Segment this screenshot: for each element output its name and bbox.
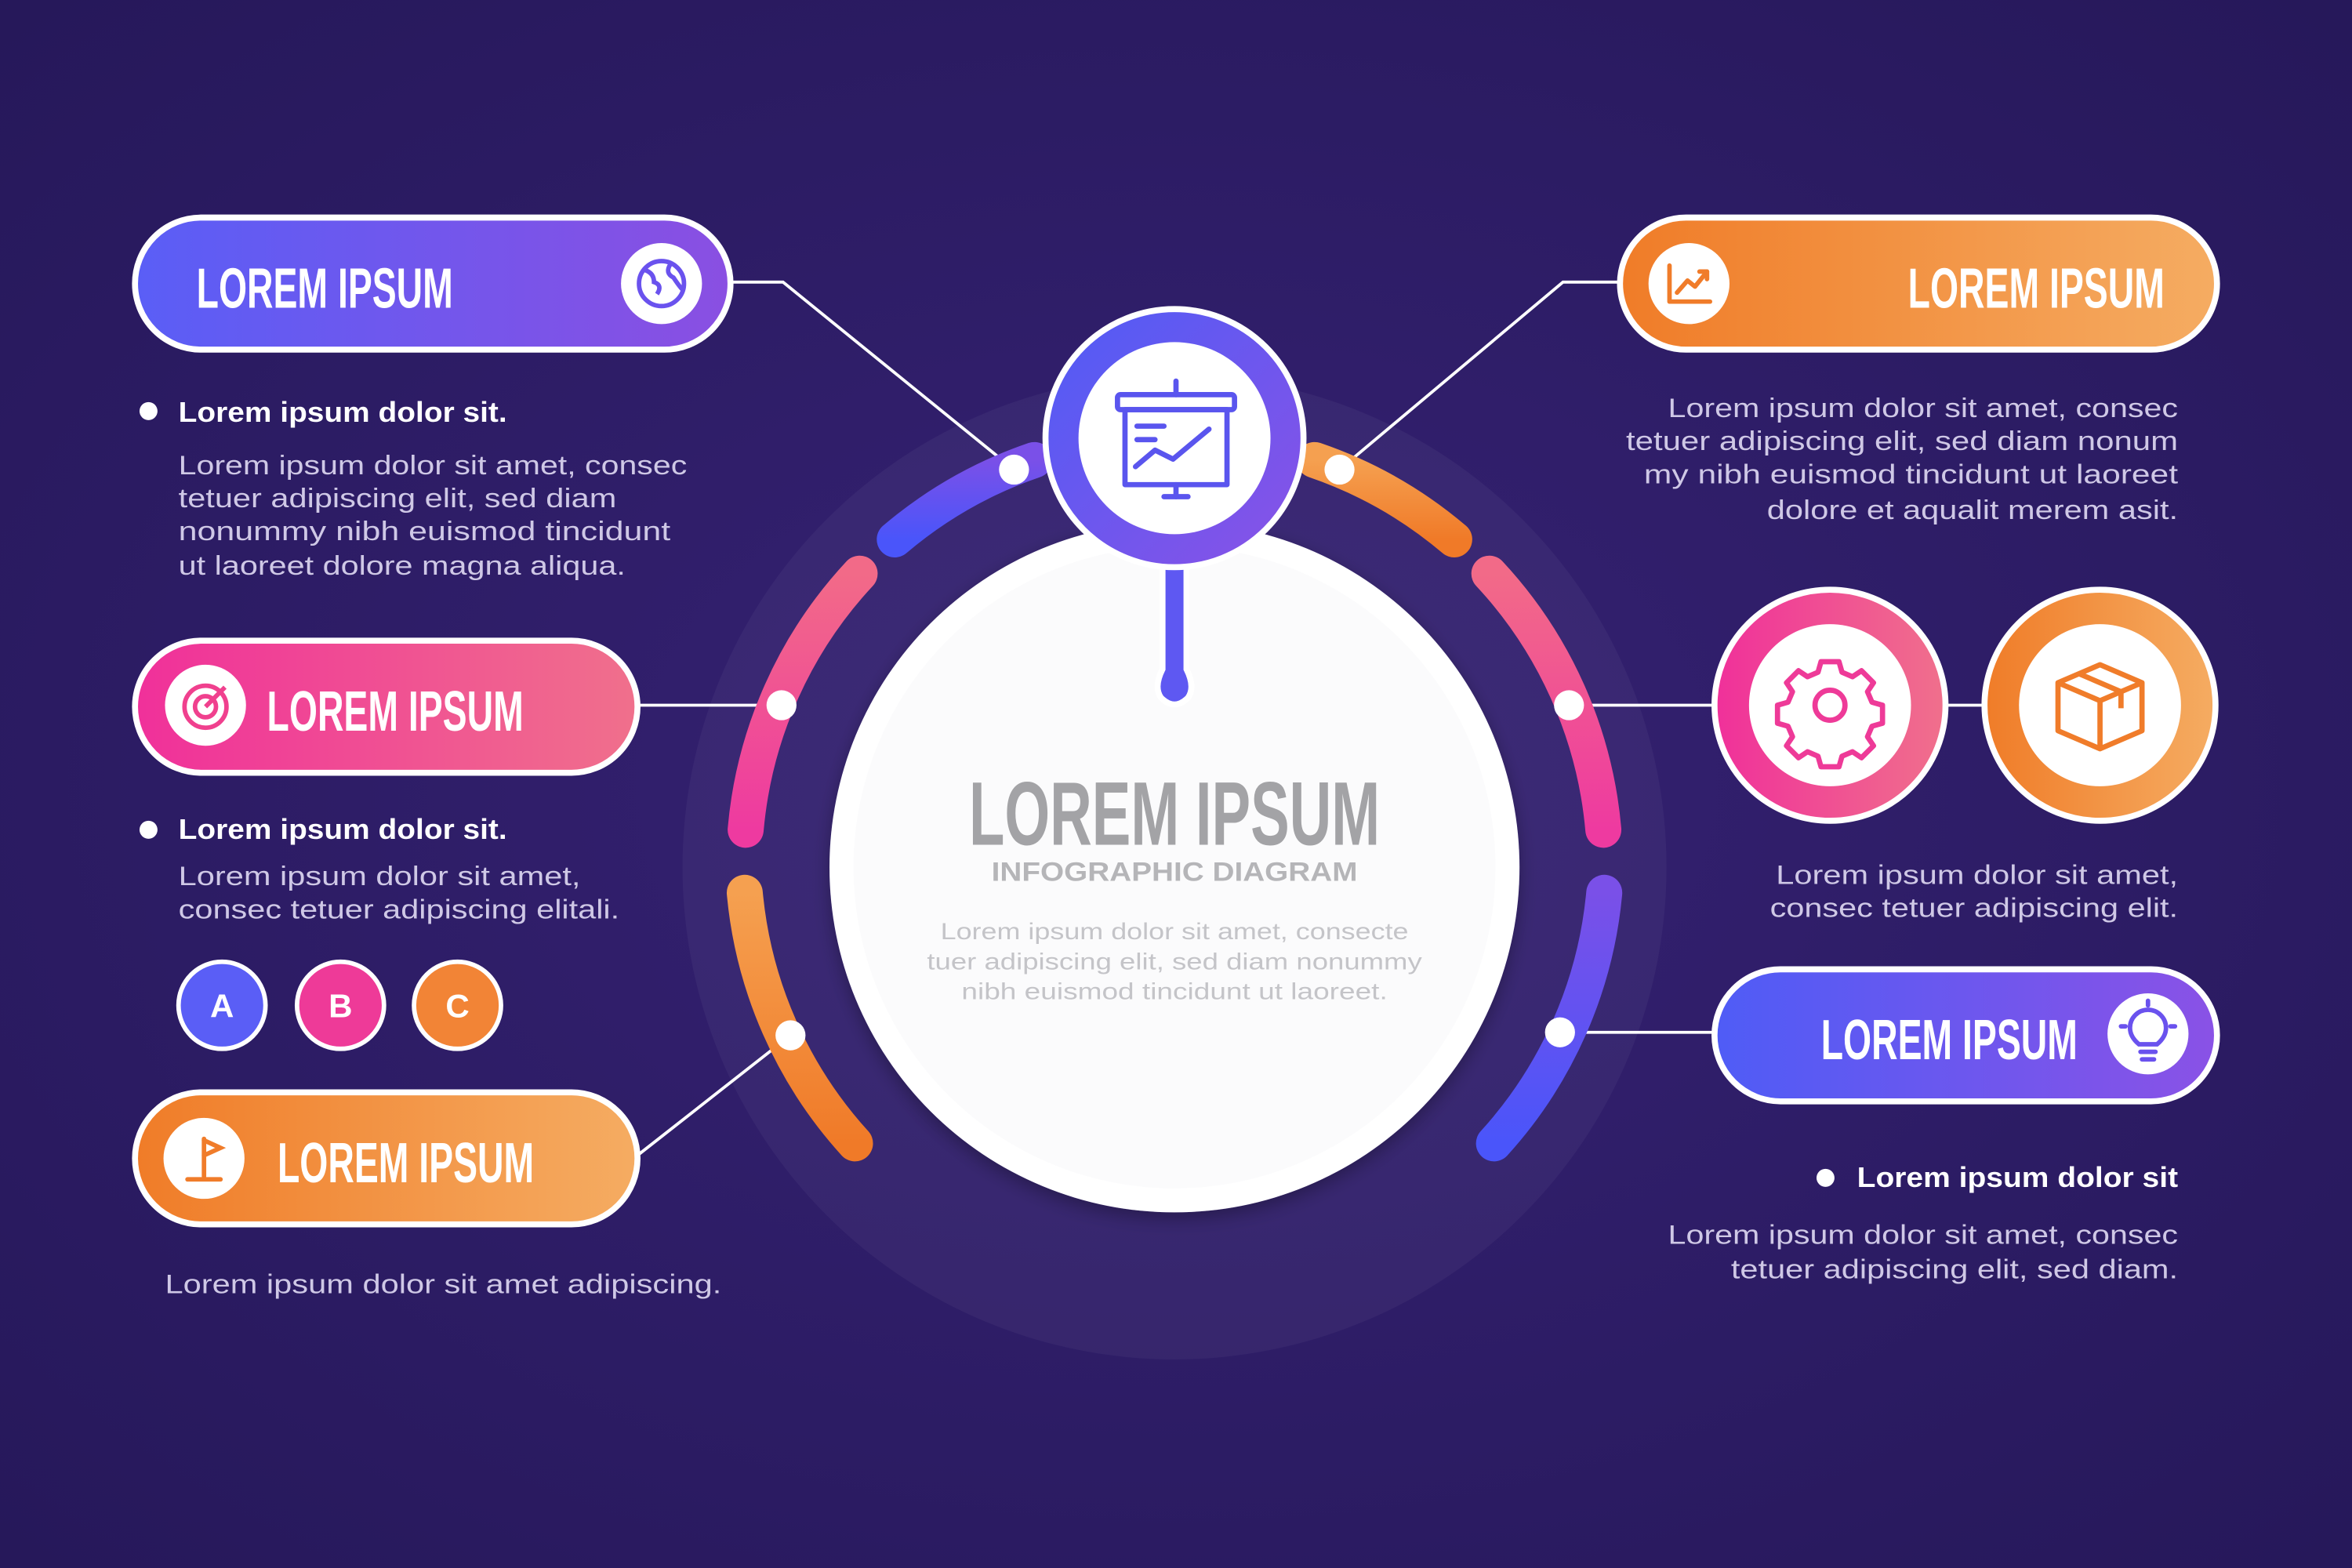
text block: bottom-right: Lorem ipsum dolor sit [1857,1161,2178,1193]
text block: bottom-right: tetuer adipiscing elit, sed diam. [1731,1255,2178,1285]
text block: top-right: my nibh euismod tincidunt ut laoreet [1644,459,2179,489]
ABC circles: A [210,988,234,1025]
pill: top-left blue: LOREM IPSUM [197,256,453,320]
arc: left pink [746,574,859,829]
ABC circles: B [328,988,353,1025]
text block: top-left: Lorem ipsum dolor sit amet, consec [179,451,687,481]
text block: top-left: ut laoreet dolore magna aliqua. [179,551,626,581]
text block: left middle: consec tetuer adipiscing elitali. [179,895,619,924]
text block: bottom-right: Lorem ipsum dolor sit amet, consec [1668,1221,2178,1250]
text block: top-right: tetuer adipiscing elit, sed diam nonum [1626,426,2178,456]
pill: left pink: LOREM IPSUM [267,680,524,743]
pill: left pink [135,641,637,773]
icon: flag [164,1118,245,1199]
pill: bottom-left orange [135,1092,637,1225]
pill: top-right orange [1620,218,2217,350]
text block: top-left [140,396,687,581]
faint halo circle [683,375,1667,1359]
text block: left middle [140,813,619,924]
text block: left middle: Lorem ipsum dolor sit. [179,813,507,845]
icon: globe [621,243,702,324]
icon: presentation board [1117,381,1235,496]
text block: top-right: dolore et aqualit merem asit. [1767,495,2178,525]
arc: top-right orange [1315,460,1454,539]
center paragraph [927,919,1422,1005]
icon circle: box [1984,590,2216,821]
connector dots [767,455,1584,1051]
arc: right pink [1490,574,1603,829]
icon: lightbulb [2107,993,2188,1074]
text: right middle: consec tetuer adipiscing elit. [1770,893,2178,923]
center circle [829,522,1519,1212]
ring segments [745,460,1604,1143]
arc: left orange [745,893,855,1143]
text: right middle: Lorem ipsum dolor sit amet, [1776,860,2178,890]
text block: bottom-right [1668,1161,2178,1285]
pin with presentation icon [1046,309,1304,705]
arc: top-left blue [895,460,1034,539]
center title: LOREM IPSUM [969,764,1380,865]
center paragraph: nibh euismod tincidunt ut laoreet. [961,979,1388,1005]
text block: top-right: Lorem ipsum dolor sit amet, consec [1668,394,2178,423]
pill: right blue [1715,969,2217,1102]
center paragraph: Lorem ipsum dolor sit amet, consecte [941,919,1409,945]
text block: top-left: tetuer adipiscing elit, sed diam [179,484,616,514]
text block: top-left: Lorem ipsum dolor sit. [179,396,507,428]
pill: top-right orange: LOREM IPSUM [1908,256,2165,320]
icon circle: gear [1715,590,1946,821]
text block: left middle: Lorem ipsum dolor sit amet, [179,862,580,891]
text block: top-left: nonummy nibh euismod tincidunt [179,517,671,546]
text: right middle [1770,860,2178,923]
icon: target [165,665,246,746]
text: bottom-left: Lorem ipsum dolor sit amet adipiscing. [165,1270,721,1300]
ABC circles: C [445,988,470,1025]
pill: right blue: LOREM IPSUM [1821,1008,2078,1072]
ABC circles [179,962,501,1049]
center paragraph: tuer adipiscing elit, sed diam nonummy [927,949,1422,975]
text block: top-right [1626,394,2179,525]
icon: chart [1649,243,1730,324]
arc: right blue [1494,893,1604,1143]
connector lines [637,282,1983,1156]
center subtitle: INFOGRAPHIC DIAGRAM [992,857,1358,887]
pill: top-left blue [135,218,731,350]
pill: bottom-left orange: LOREM IPSUM [278,1131,534,1195]
